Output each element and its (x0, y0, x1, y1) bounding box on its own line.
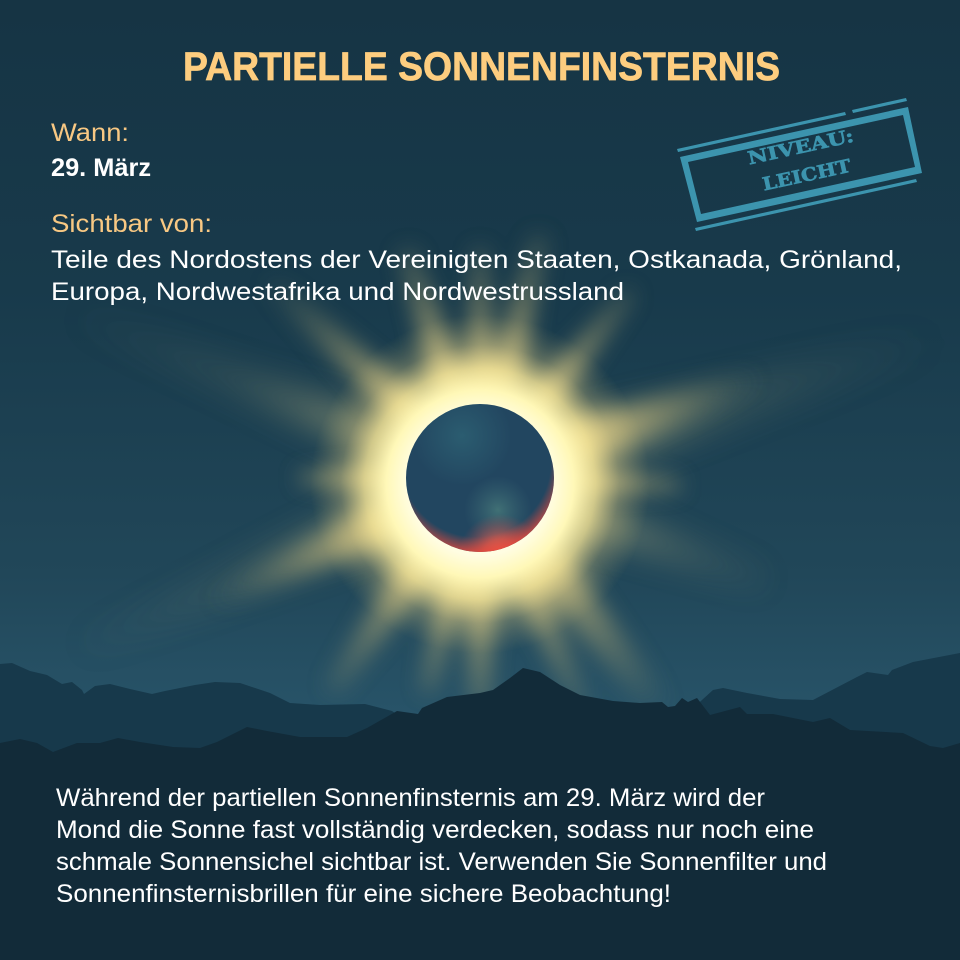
visibility regions text (51, 246, 902, 306)
description paragraph: Sonnenfinsternisbrillen für eine sichere Beobachtung! (56, 880, 671, 908)
stamp text: LEICHT (761, 156, 854, 196)
long faint rays (73, 297, 948, 668)
stamp text: NIVEAU: (746, 126, 856, 169)
stamp: Niveau leicht (677, 98, 922, 231)
label: Wann: Wann: (51, 119, 129, 147)
date: 29. März (51, 154, 151, 182)
central glow (310, 314, 650, 654)
eclipse corona with light rays (73, 231, 948, 745)
mountains: front ridge (0, 668, 960, 960)
mountains: back ridge (0, 653, 960, 780)
label: Sichtbar von: Sichtbar von: (51, 210, 212, 238)
title: PARTIELLE SONNENFINSTERNIS (183, 45, 780, 89)
description paragraph: Während der partiellen Sonnenfinsternis am 29. März wird der (56, 784, 765, 812)
description paragraph: Mond die Sonne fast vollständig verdecken, sodass nur noch eine (56, 816, 814, 844)
visibility regions text: Europa, Nordwestafrika und Nordwestrussland (51, 278, 624, 306)
strong rays (198, 231, 771, 745)
description paragraph (56, 784, 827, 908)
visibility regions text: Teile des Nordostens der Vereinigten Staaten, Ostkanada, Grönland, (51, 246, 902, 274)
description paragraph: schmale Sonnensichel sichtbar ist. Verwenden Sie Sonnenfilter und (56, 848, 827, 876)
stamp text (746, 126, 856, 196)
moon disc (406, 404, 554, 552)
stamp frame (680, 107, 922, 222)
